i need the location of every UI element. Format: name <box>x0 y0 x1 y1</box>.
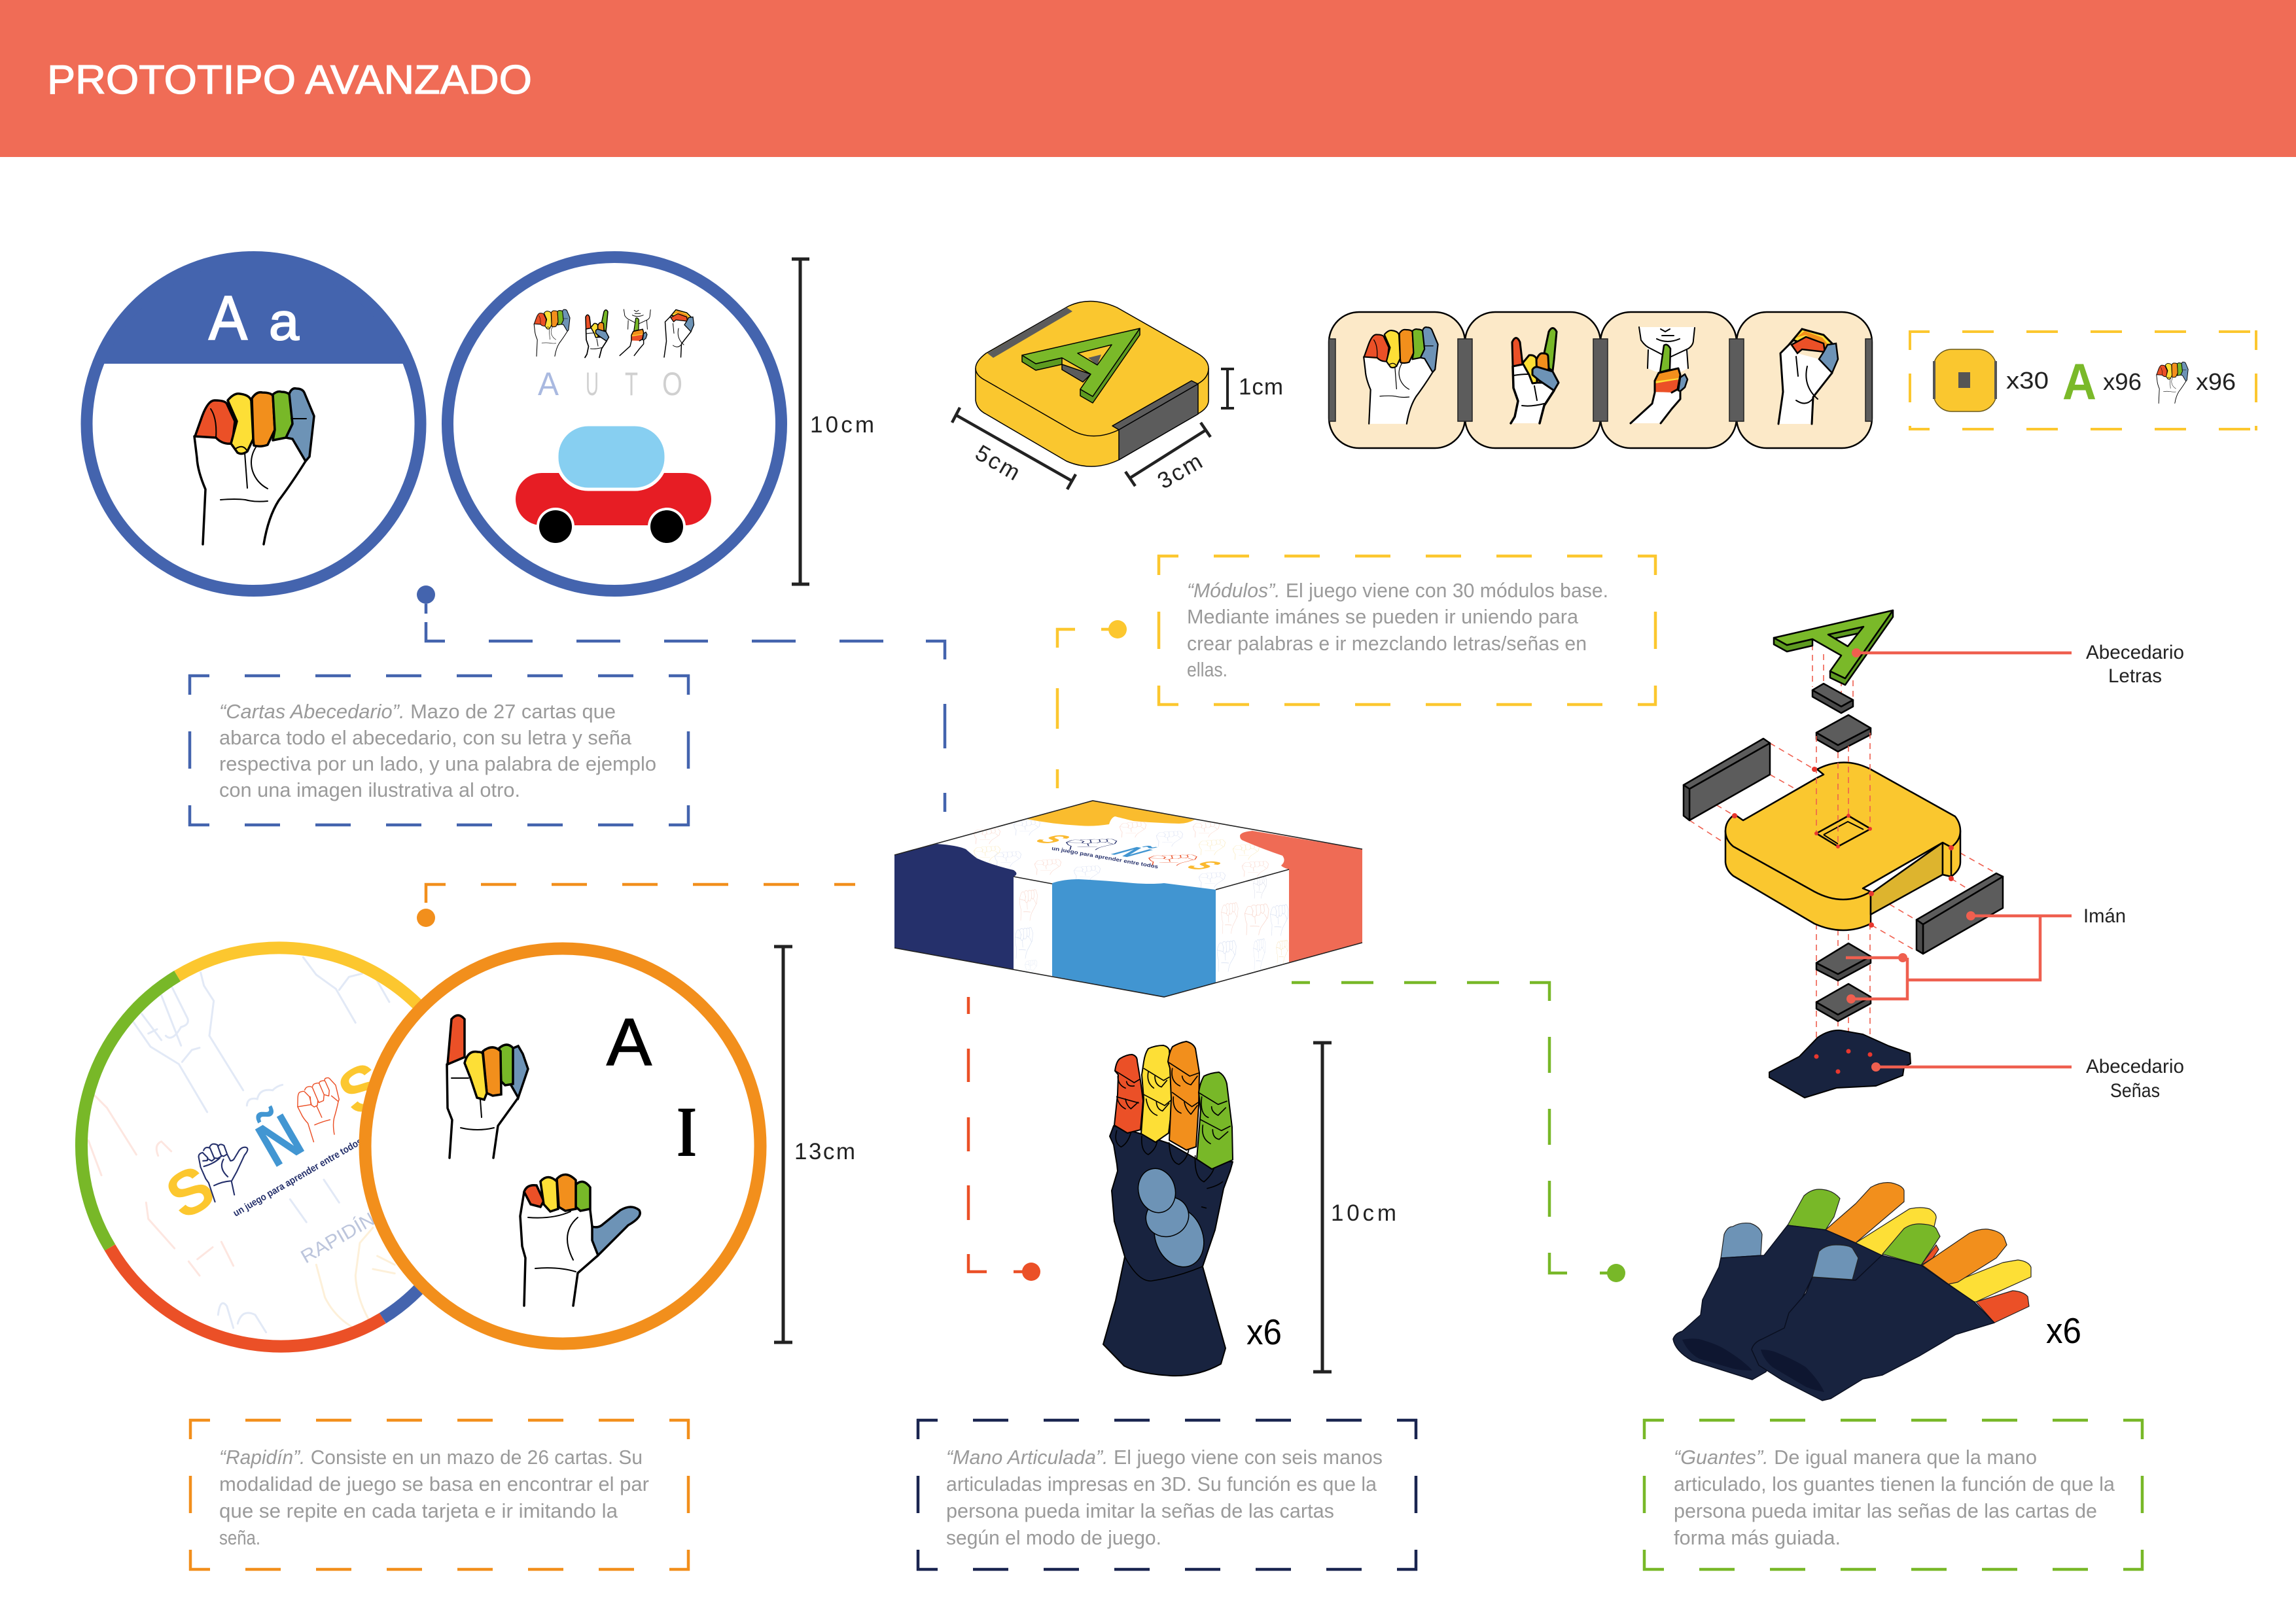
card: letter A front <box>79 249 432 591</box>
text box: mano articulada: persona pueda imitar la señas de las cartas <box>946 1499 1334 1522</box>
logo on lid: un juego para aprender entre todos <box>1051 845 1159 870</box>
text box: rapidin <box>189 1419 690 1571</box>
finger joint details <box>1115 1062 1230 1208</box>
callout: abecedario senas: Señas <box>2110 1080 2160 1102</box>
yellow base module <box>1725 763 1960 930</box>
hand body <box>1103 1126 1233 1376</box>
module body <box>976 301 1209 466</box>
thumb <box>1133 1164 1212 1274</box>
text box: modulos: “Módulos”. El juego viene con 30 módulos base. <box>1187 579 1608 602</box>
dimension: 13cm: 13cm <box>794 1139 855 1164</box>
front glove cuff <box>1761 1350 1824 1392</box>
text box: guantes: forma más guiada. <box>1674 1526 1841 1549</box>
coral wave <box>1240 831 1362 962</box>
dimension: 1cm <box>1221 369 1283 408</box>
card: rapidin back with logo: Ñ <box>245 1100 314 1181</box>
box base faces <box>894 801 1362 997</box>
logo on lid: Ñ <box>1101 845 1163 860</box>
dimension: 5cm: 5cm <box>971 440 1025 485</box>
text box: modulos <box>1157 555 1657 706</box>
logo on lid: S <box>1176 858 1232 873</box>
card: rapidin front <box>365 949 760 1344</box>
faint hand pattern <box>88 957 395 1333</box>
projection guides <box>1689 644 1996 1072</box>
connector: rapidin <box>417 884 855 927</box>
text box: cartas abecedario: “Cartas Abecedario”. Mazo de 27 cartas que <box>219 700 616 723</box>
wrist detail <box>1125 1257 1203 1281</box>
finger: orange <box>1168 1041 1199 1150</box>
text box: cartas abecedario <box>188 674 690 826</box>
text box: rapidin: seña. <box>219 1526 260 1549</box>
card: rapidin back with logo: S <box>154 1151 226 1233</box>
magnet: right bar <box>1916 873 2003 954</box>
front glove thumb <box>1812 1245 1858 1280</box>
tile 2 <box>1465 312 1600 448</box>
magnet: square top <box>1816 715 1871 752</box>
legend box: contents: x96 <box>2196 368 2236 395</box>
dimension: 1cm: 1cm <box>1239 374 1283 400</box>
text box: mano articulada <box>917 1419 1417 1571</box>
card: word AUTO back <box>448 257 781 591</box>
hand: thumb out <box>520 1174 640 1306</box>
logo on lid: S <box>1025 832 1081 846</box>
connector: mano <box>968 997 1040 1281</box>
text box: cartas abecedario: con una imagen ilustrativa al otro. <box>219 778 520 801</box>
back glove body <box>1673 1225 1882 1380</box>
magnet: lower one <box>1816 943 1871 981</box>
magnets between tiles <box>1329 339 1872 421</box>
callout: abecedario senas: Abecedario <box>2086 1056 2184 1077</box>
blue wave <box>1052 879 1216 997</box>
text box: modulos: Mediante imánes se pueden ir uniendo para <box>1187 605 1579 628</box>
callout: iman <box>1846 905 2126 1003</box>
quantity x6: x6 <box>1246 1312 1282 1352</box>
articulated hand <box>1103 1041 1282 1376</box>
legend box: contents <box>1910 330 2257 430</box>
dimension: 10cm cards <box>792 259 874 584</box>
card: letter A front: A <box>209 283 247 353</box>
text box: mano articulada: “Mano Articulada”. El juego viene con seis manos <box>946 1446 1383 1469</box>
navy wave <box>894 844 1017 969</box>
dimension: 3cm: 3cm <box>1153 449 1207 494</box>
logo on lid <box>1025 832 1232 873</box>
legend box: contents: A <box>2062 353 2096 410</box>
callout: abecedario senas <box>1871 1056 2184 1102</box>
magnet: lower two <box>1816 984 1871 1021</box>
text box: guantes: “Guantes”. De igual manera que la mano <box>1674 1446 2037 1469</box>
text box: guantes: articulado, los guantes tienen la función de que la <box>1674 1473 2115 1495</box>
back glove fingers <box>1721 1183 1936 1258</box>
card: rapidin back with logo: RAPIDÍN <box>297 1208 379 1268</box>
front glove body <box>1752 1255 1994 1401</box>
dimension: 10cm hand <box>1313 1043 1396 1372</box>
quantity x6: x6 <box>2046 1310 2081 1351</box>
dimension: 13cm <box>774 947 855 1342</box>
hand: pinky up <box>447 1015 528 1158</box>
text box: modulos: crear palabras e ir mezclando letras/señas en <box>1187 632 1587 655</box>
callout: abecedario letras <box>1852 642 2184 687</box>
callout: iman: Imán <box>2083 905 2126 927</box>
magnet: small top <box>1812 684 1853 713</box>
gloves <box>1673 1183 2081 1401</box>
finger: yellow <box>1141 1045 1173 1142</box>
box edge lines <box>894 801 1362 997</box>
callout: abecedario letras: Letras <box>2108 665 2162 687</box>
dimension: 5cm <box>952 408 1076 489</box>
card: rapidin back with logo <box>82 948 478 1346</box>
card: rapidin back with logo: un juego para aprender entre todos <box>232 1136 364 1219</box>
navy sign piece <box>1769 1030 1911 1098</box>
tile 3 <box>1600 312 1737 448</box>
module isometric with dimensions <box>952 301 1283 494</box>
finger: red <box>1114 1055 1143 1133</box>
game box <box>894 801 1362 997</box>
text box: cartas abecedario: abarca todo el abecedario, con su letra y seña <box>219 726 632 749</box>
yellow wave <box>1027 801 1195 826</box>
dimension: 10cm cards: 10cm <box>810 412 874 438</box>
back glove cuff <box>1682 1338 1752 1370</box>
legend box: contents: x30 <box>2006 367 2049 394</box>
module strip with four hands <box>1329 312 1872 448</box>
title: PROTOTIPO AVANZADO <box>47 58 532 103</box>
connector: guantes <box>1292 983 1625 1282</box>
card: word AUTO back: A <box>538 366 559 402</box>
card: letter A front: a <box>269 292 300 351</box>
text box: guantes: persona pueda imitar las señas de las cartas de <box>1674 1499 2097 1522</box>
exploded module diagram <box>1684 610 2184 1102</box>
guides over base module <box>1816 733 1870 846</box>
top face doodles <box>974 820 1269 888</box>
text box: mano articulada: articuladas impresas en 3D. Su función es que la <box>946 1473 1377 1495</box>
finger: green <box>1197 1072 1233 1169</box>
legend box: contents: x96 <box>2103 368 2142 395</box>
tile 1 <box>1329 312 1465 448</box>
card: rapidin front: I <box>677 1092 697 1172</box>
card: word AUTO back: U <box>586 366 599 402</box>
text box: modulos: ellas. <box>1187 658 1227 681</box>
panel: cartas abecedario cards <box>79 249 781 591</box>
rapidin cards <box>82 948 760 1346</box>
text box: rapidin: modalidad de juego se basa en encontrar el par <box>219 1473 649 1495</box>
tile 4 <box>1737 312 1872 448</box>
letter A piece <box>1774 610 1893 685</box>
callout: abecedario letras: Abecedario <box>2086 642 2184 663</box>
connector: modulos <box>1057 620 1127 788</box>
green letter A <box>1022 328 1140 403</box>
text box: cartas abecedario: respectiva por un lado, y una palabra de ejemplo <box>219 752 656 775</box>
header band <box>0 0 2296 157</box>
card: word AUTO back: T <box>625 366 638 402</box>
text box: mano articulada: según el modo de juego. <box>946 1526 1161 1549</box>
card: word AUTO back: O <box>662 366 682 402</box>
text box: rapidin: que se repite en cada tarjeta e ir imitando la <box>219 1499 618 1522</box>
card: rapidin front: A <box>607 1005 652 1079</box>
side face doodles <box>1015 877 1288 974</box>
text box: guantes <box>1643 1419 2144 1571</box>
front glove fingers <box>1882 1224 2031 1323</box>
card: rapidin back with logo: S <box>327 1048 398 1130</box>
connector: cartas <box>417 585 945 812</box>
dimension: 3cm <box>1125 423 1210 494</box>
guide end points <box>1732 767 1954 1074</box>
dimension: 10cm hand: 10cm <box>1331 1200 1396 1226</box>
text box: rapidin: “Rapidín”. Consiste en un mazo de 26 cartas. Su <box>219 1446 643 1469</box>
magnet: left bar <box>1684 739 1770 820</box>
